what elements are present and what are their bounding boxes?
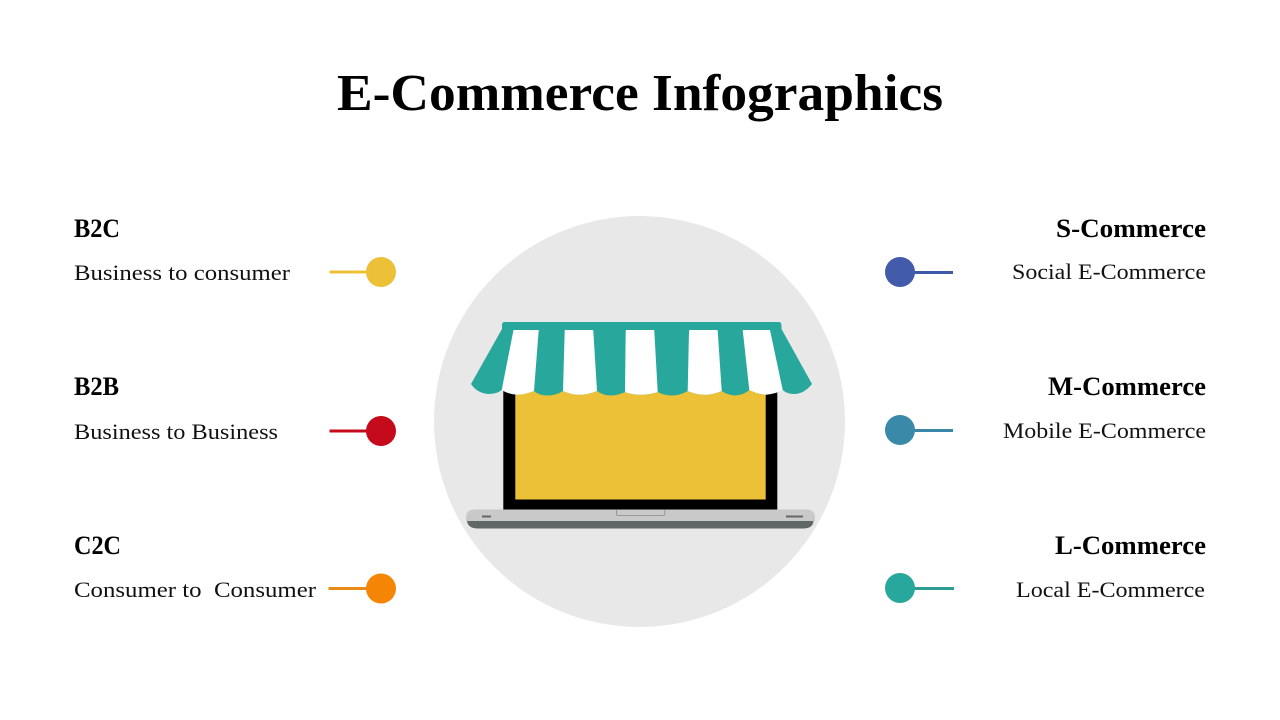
item: C2C: C2C bbox=[74, 531, 121, 560]
item: S-Commerce: S-Commerce bbox=[1056, 214, 1206, 243]
icon: laptop storefront bbox=[466, 322, 815, 528]
title: E-Commerce Infographics bbox=[337, 65, 943, 122]
item: M-Commerce: Mobile E-Commerce bbox=[1003, 418, 1206, 443]
item: S-Commerce bbox=[885, 214, 1206, 287]
awning bbox=[471, 322, 812, 396]
awning white stripes bbox=[502, 330, 783, 395]
awning teal base bbox=[471, 322, 812, 396]
item: B2C: B2C bbox=[74, 214, 120, 243]
background circle bbox=[434, 216, 845, 627]
laptop base bbox=[466, 510, 815, 528]
item: M-Commerce: M-Commerce bbox=[1048, 372, 1206, 401]
item: L-Commerce: L-Commerce bbox=[1055, 531, 1206, 560]
laptop screen bbox=[503, 380, 777, 510]
item: B2C: Business to consumer bbox=[74, 260, 291, 285]
item: B2C bbox=[74, 214, 396, 287]
item: C2C bbox=[74, 531, 396, 604]
item: B2B: Business to Business bbox=[74, 419, 278, 444]
item: B2B bbox=[74, 372, 396, 446]
item: L-Commerce bbox=[885, 531, 1206, 603]
item: C2C: Consumer to Consumer bbox=[74, 577, 317, 602]
item: L-Commerce: Local E-Commerce bbox=[1016, 577, 1205, 602]
item: B2B: B2B bbox=[74, 372, 119, 401]
item: S-Commerce: Social E-Commerce bbox=[1012, 259, 1206, 284]
item: M-Commerce bbox=[885, 372, 1206, 445]
